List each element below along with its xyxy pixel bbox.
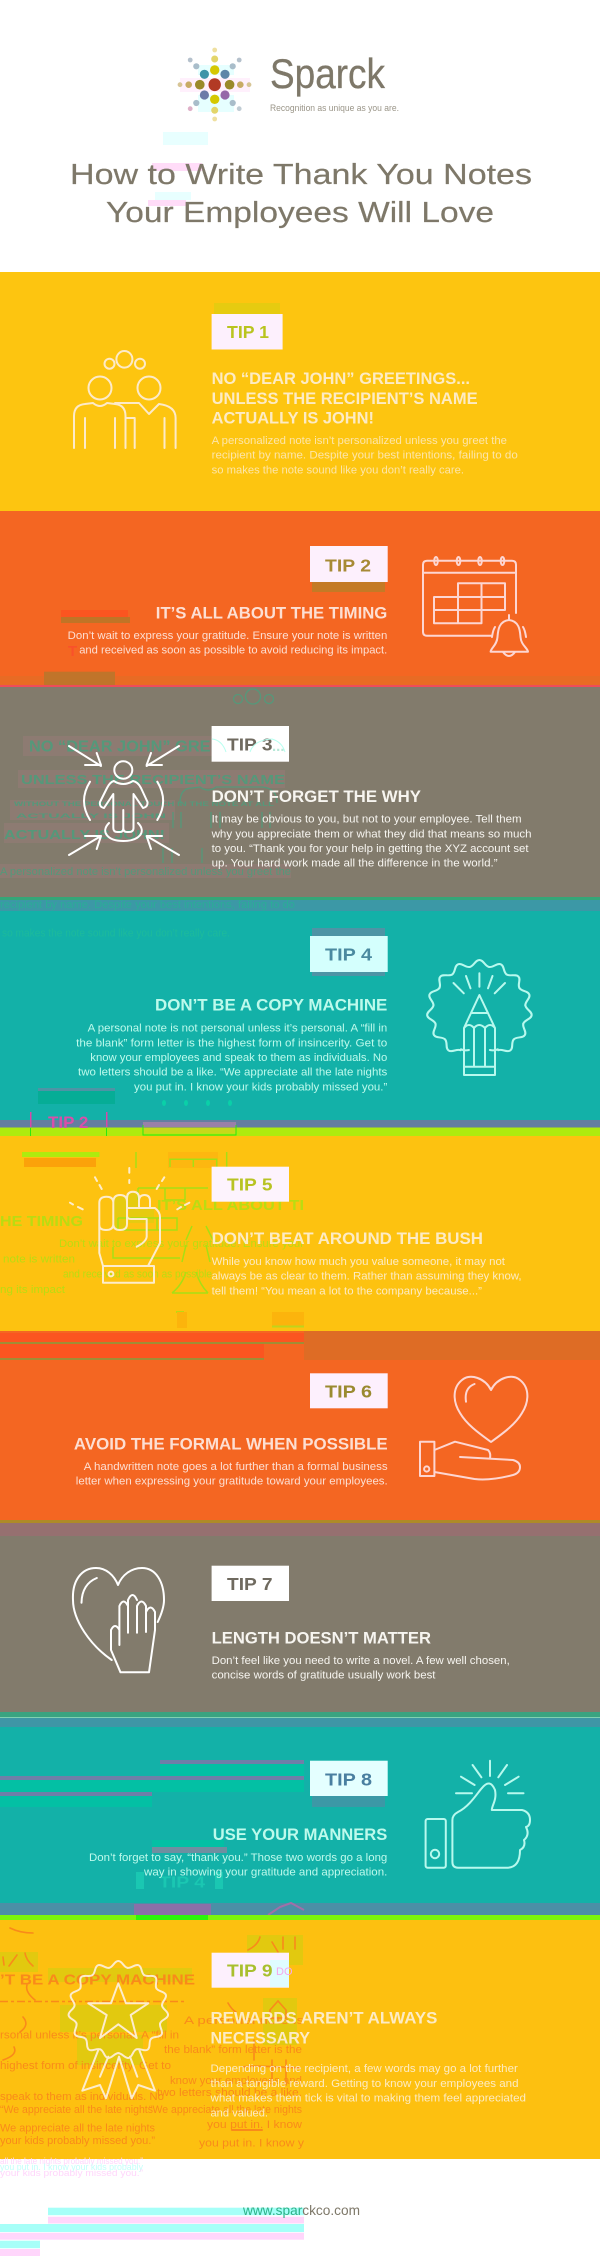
panel: tip 2 [0, 511, 600, 687]
tip 3 heading: DON’T FORGET THE WHY [212, 787, 422, 806]
panel: tip 9: “We appreciate all the late nights [0, 2104, 153, 2116]
tip 1 heading: NO “DEAR JOHN” GREETINGS... [212, 369, 470, 388]
tip 4 body: A personal note is not personal unless it’s personal. A “fill in [88, 1023, 387, 1035]
tip 3 body: It may be obvious to you, but not to your employee. Tell them [212, 814, 522, 826]
tip 9 badge [212, 1953, 293, 1988]
icon: heart over open hand [420, 1377, 527, 1480]
tip 7 badge: TIP 7 [227, 1574, 272, 1594]
tip 9 body: what makes them tick is vital to making them feel appreciated [209, 2093, 526, 2105]
tip 1 body: A personalized note isn’t personalized unless you greet the [212, 435, 507, 447]
tip 1 badge [212, 314, 283, 350]
tip 1 body: so makes the note sound like you don’t really care. [212, 464, 464, 476]
tip 5 body: While you know how much you value someone, it may not [212, 1256, 506, 1268]
icon: team of people [74, 351, 176, 448]
tip 7 body: Don’t feel like you need to write a novel. A few well chosen, [212, 1655, 510, 1667]
tip 7 body [212, 1655, 510, 1682]
tip 3 body: to you. “Thank you for your help in getting the XYZ account set [212, 843, 529, 855]
tip 2 heading: IT’S ALL ABOUT THE TIMING [156, 603, 387, 622]
panel: tip 9: speak to them as individuals. No [0, 2091, 164, 2103]
tip 1 heading: UNLESS THE RECIPIENT’S NAME [212, 389, 478, 408]
panel: tip 9: ’T BE A COPY MACHINE [0, 1972, 195, 1988]
tip 3 badge [212, 726, 289, 762]
icon: raised fist [70, 1168, 189, 1283]
tip 4 body: two letters should be a like. “We appreciate all the late nights [78, 1067, 388, 1079]
tip 9 heading: REWARDS AREN’T ALWAYS [210, 2008, 437, 2027]
tip 1 heading: ACTUALLY IS JOHN! [212, 408, 374, 427]
tip 6 body: A handwritten note goes a lot further than a formal business [84, 1461, 388, 1473]
header logo: Recognition as unique as you are. [270, 103, 399, 114]
panel: tip 3: UNLESS THE RECIPIENT’S NAME [21, 772, 285, 787]
panel: tip 1 [0, 272, 600, 511]
panel: tip 9: you put in. I know y [199, 2138, 304, 2150]
icon: pencil in badge [426, 960, 533, 1075]
tip 4 body [76, 1023, 388, 1093]
panel: tip 9: We appreciate all the late nights [0, 2123, 155, 2135]
tip 9 badge: DO [276, 1966, 293, 1978]
tip 8 body: Don’t forget to say, “thank you.” Those two words go a long [89, 1852, 387, 1864]
icon: calendar with bell [423, 557, 528, 656]
tip 6 badge: TIP 6 [325, 1381, 372, 1401]
footer url: www.sparckco.com [242, 2202, 360, 2218]
tip 9 body [209, 2063, 526, 2120]
panel: tip 5: HE TIMING [0, 1213, 83, 1230]
tip 4 body: the blank” form letter is the highest form of insincerity. Get to [76, 1037, 387, 1049]
panel: tip 9: know your employees and [170, 2075, 302, 2087]
tip 1 heading [212, 369, 478, 427]
panel: tip 4: recipient by name. Despite your best intentions, failing to do [0, 899, 295, 911]
text: all the late nights probably missed you.” [0, 2156, 143, 2166]
tip 8 badge: TIP 8 [325, 1769, 372, 1789]
tip 9 badge: TIP 9 [227, 1961, 273, 1981]
tip 8 heading: USE YOUR MANNERS [213, 1825, 387, 1844]
tip 9 heading: NECESSARY [210, 2028, 311, 2047]
panel: tip 9: rsonal unless it’s personal. A “fill in [0, 2030, 179, 2042]
panel: tip 9: A personal note is [184, 2015, 304, 2027]
panel: tip 5: Don’t wait to express your gratitude. Ensure your [59, 1238, 304, 1250]
panel: tip 3: ACTUALLY IS JOHN [16, 814, 166, 820]
tip 4 body: know your employees and speak to them as individuals. No [90, 1052, 387, 1064]
panel: tip 3: ... [272, 738, 285, 755]
panel: tip 5 [0, 1112, 600, 1331]
tip 1 badge: TIP 1 [227, 322, 269, 342]
panel: tip 3: A personalized note isn’t personalized unless you greet the [0, 866, 291, 878]
tip 1 body [212, 435, 518, 476]
tip 6 body: letter when expressing your gratitude toward your employees. [76, 1476, 388, 1488]
tip 5 badge: TIP 5 [227, 1175, 273, 1195]
tip 2 body [68, 630, 387, 657]
panel: tip 2: T [68, 643, 77, 660]
icon: person with arrows [69, 746, 179, 855]
tip 7 body: concise words of gratitude usually work best [212, 1670, 436, 1682]
tip 4 badge [310, 936, 388, 972]
panel: tip 9: “We appreciate all the late nights [149, 2104, 302, 2116]
header logo [178, 48, 399, 121]
panel: tip 3: WITHOUT THE PERSONAL TOUCH IN THE NOTE AT ALL [14, 802, 275, 808]
tip 4 body: you put in. I know your kids probably missed you.” [134, 1081, 388, 1093]
panel: tip 5: ng its impact [0, 1284, 65, 1296]
tip 4 badge: TIP 4 [325, 945, 372, 965]
tip 6 heading: AVOID THE FORMAL WHEN POSSIBLE [74, 1434, 388, 1453]
panel: tip 9: you put in. I know [207, 2119, 303, 2131]
tip 2 body: and received as soon as possible to avoid reducing its impact. [79, 645, 387, 657]
tip 2 badge [310, 546, 388, 582]
text: your kids probably missed you.” [0, 2168, 143, 2178]
tip 2 badge: TIP 2 [325, 556, 371, 576]
icon: award ribbon with star [68, 1961, 169, 2098]
panel: tip 5: IT’S ALL ABOUT TI [157, 1197, 304, 1214]
panel: tip 9: highest form of insincerity. Get to [0, 2060, 171, 2072]
panel: tip 9: your kids probably missed you.” [0, 2135, 155, 2147]
tip 9 body: Depending on the recipient, a few words may go a lot further [210, 2063, 518, 2075]
panel: tip 5: TIP 2 [48, 1113, 88, 1132]
tip 9 heading [210, 2008, 437, 2047]
panel: tip 9: two letters should be a like. [157, 2087, 302, 2099]
text: you put in. I know your kids probably [0, 2162, 143, 2172]
title: Your Employees Will Love [106, 197, 494, 229]
tip 5 body: always be as clear to them. Rather than assuming they know, [212, 1271, 522, 1283]
panel: tip 4 [0, 897, 600, 1128]
panel: tip 5: and received as soon as possible [63, 1269, 212, 1281]
tip 7 heading: LENGTH DOESN’T MATTER [212, 1628, 431, 1647]
tip 7 badge [212, 1566, 289, 1601]
tip 3 body: up. Your hard work made all the difference in the world.” [212, 858, 498, 870]
tip 5 badge [212, 1167, 289, 1202]
tip 3 body [211, 814, 532, 870]
tip 2 body: Don’t wait to express your gratitude. Ensure your note is written [68, 630, 387, 642]
panel: tip 3: ACTUALLY IS JOHN! [4, 827, 165, 842]
tip 3 badge: TIP 3 [227, 735, 273, 755]
panel: tip 9 [0, 1915, 600, 2159]
tip 5 heading: DON’T BEAT AROUND THE BUSH [212, 1229, 483, 1248]
tip 8 badge [310, 1761, 388, 1796]
tip 1 body: recipient by name. Despite your best intentions, failing to do [212, 450, 518, 462]
icon: thumbs up [426, 1761, 530, 1868]
panel: tip 3: NO “DEAR JOHN” GREETINGS... [29, 739, 285, 756]
panel: tip 8 [0, 1712, 600, 1915]
panel: tip 9: the blank” form letter is the [164, 2044, 302, 2056]
tip 6 body [76, 1461, 388, 1488]
tip 3 body: why you appreciate them or what they did that means so much [211, 828, 532, 840]
panel: tip 7 [0, 1520, 600, 1712]
tip 9 body: than a tangible reward. Getting to know your employees and [210, 2078, 518, 2090]
panel: tip 4: so makes the note sound like you don’t really care. [2, 928, 230, 940]
panel: tip 6 [0, 1331, 600, 1520]
tip 6 badge [310, 1373, 388, 1408]
panel: tip 8: TIP 4 [159, 1875, 205, 1892]
tip 9 body: and valued. [210, 2108, 268, 2120]
tip 4 heading: DON’T BE A COPY MACHINE [155, 996, 387, 1015]
icon: hand on heart [73, 1568, 164, 1672]
title: How to Write Thank You Notes [70, 159, 532, 191]
tip 5 body: tell them! “You mean a lot to the company because...” [212, 1285, 482, 1297]
tip 5 body [212, 1256, 522, 1297]
tip 8 body [89, 1852, 387, 1878]
title [70, 159, 532, 229]
panel: tip 3 [0, 687, 600, 897]
panel: tip 5: note is written [3, 1254, 75, 1266]
tip 8 body: way in showing your gratitude and appreciation. [143, 1866, 387, 1878]
header logo: Sparck [270, 50, 386, 97]
